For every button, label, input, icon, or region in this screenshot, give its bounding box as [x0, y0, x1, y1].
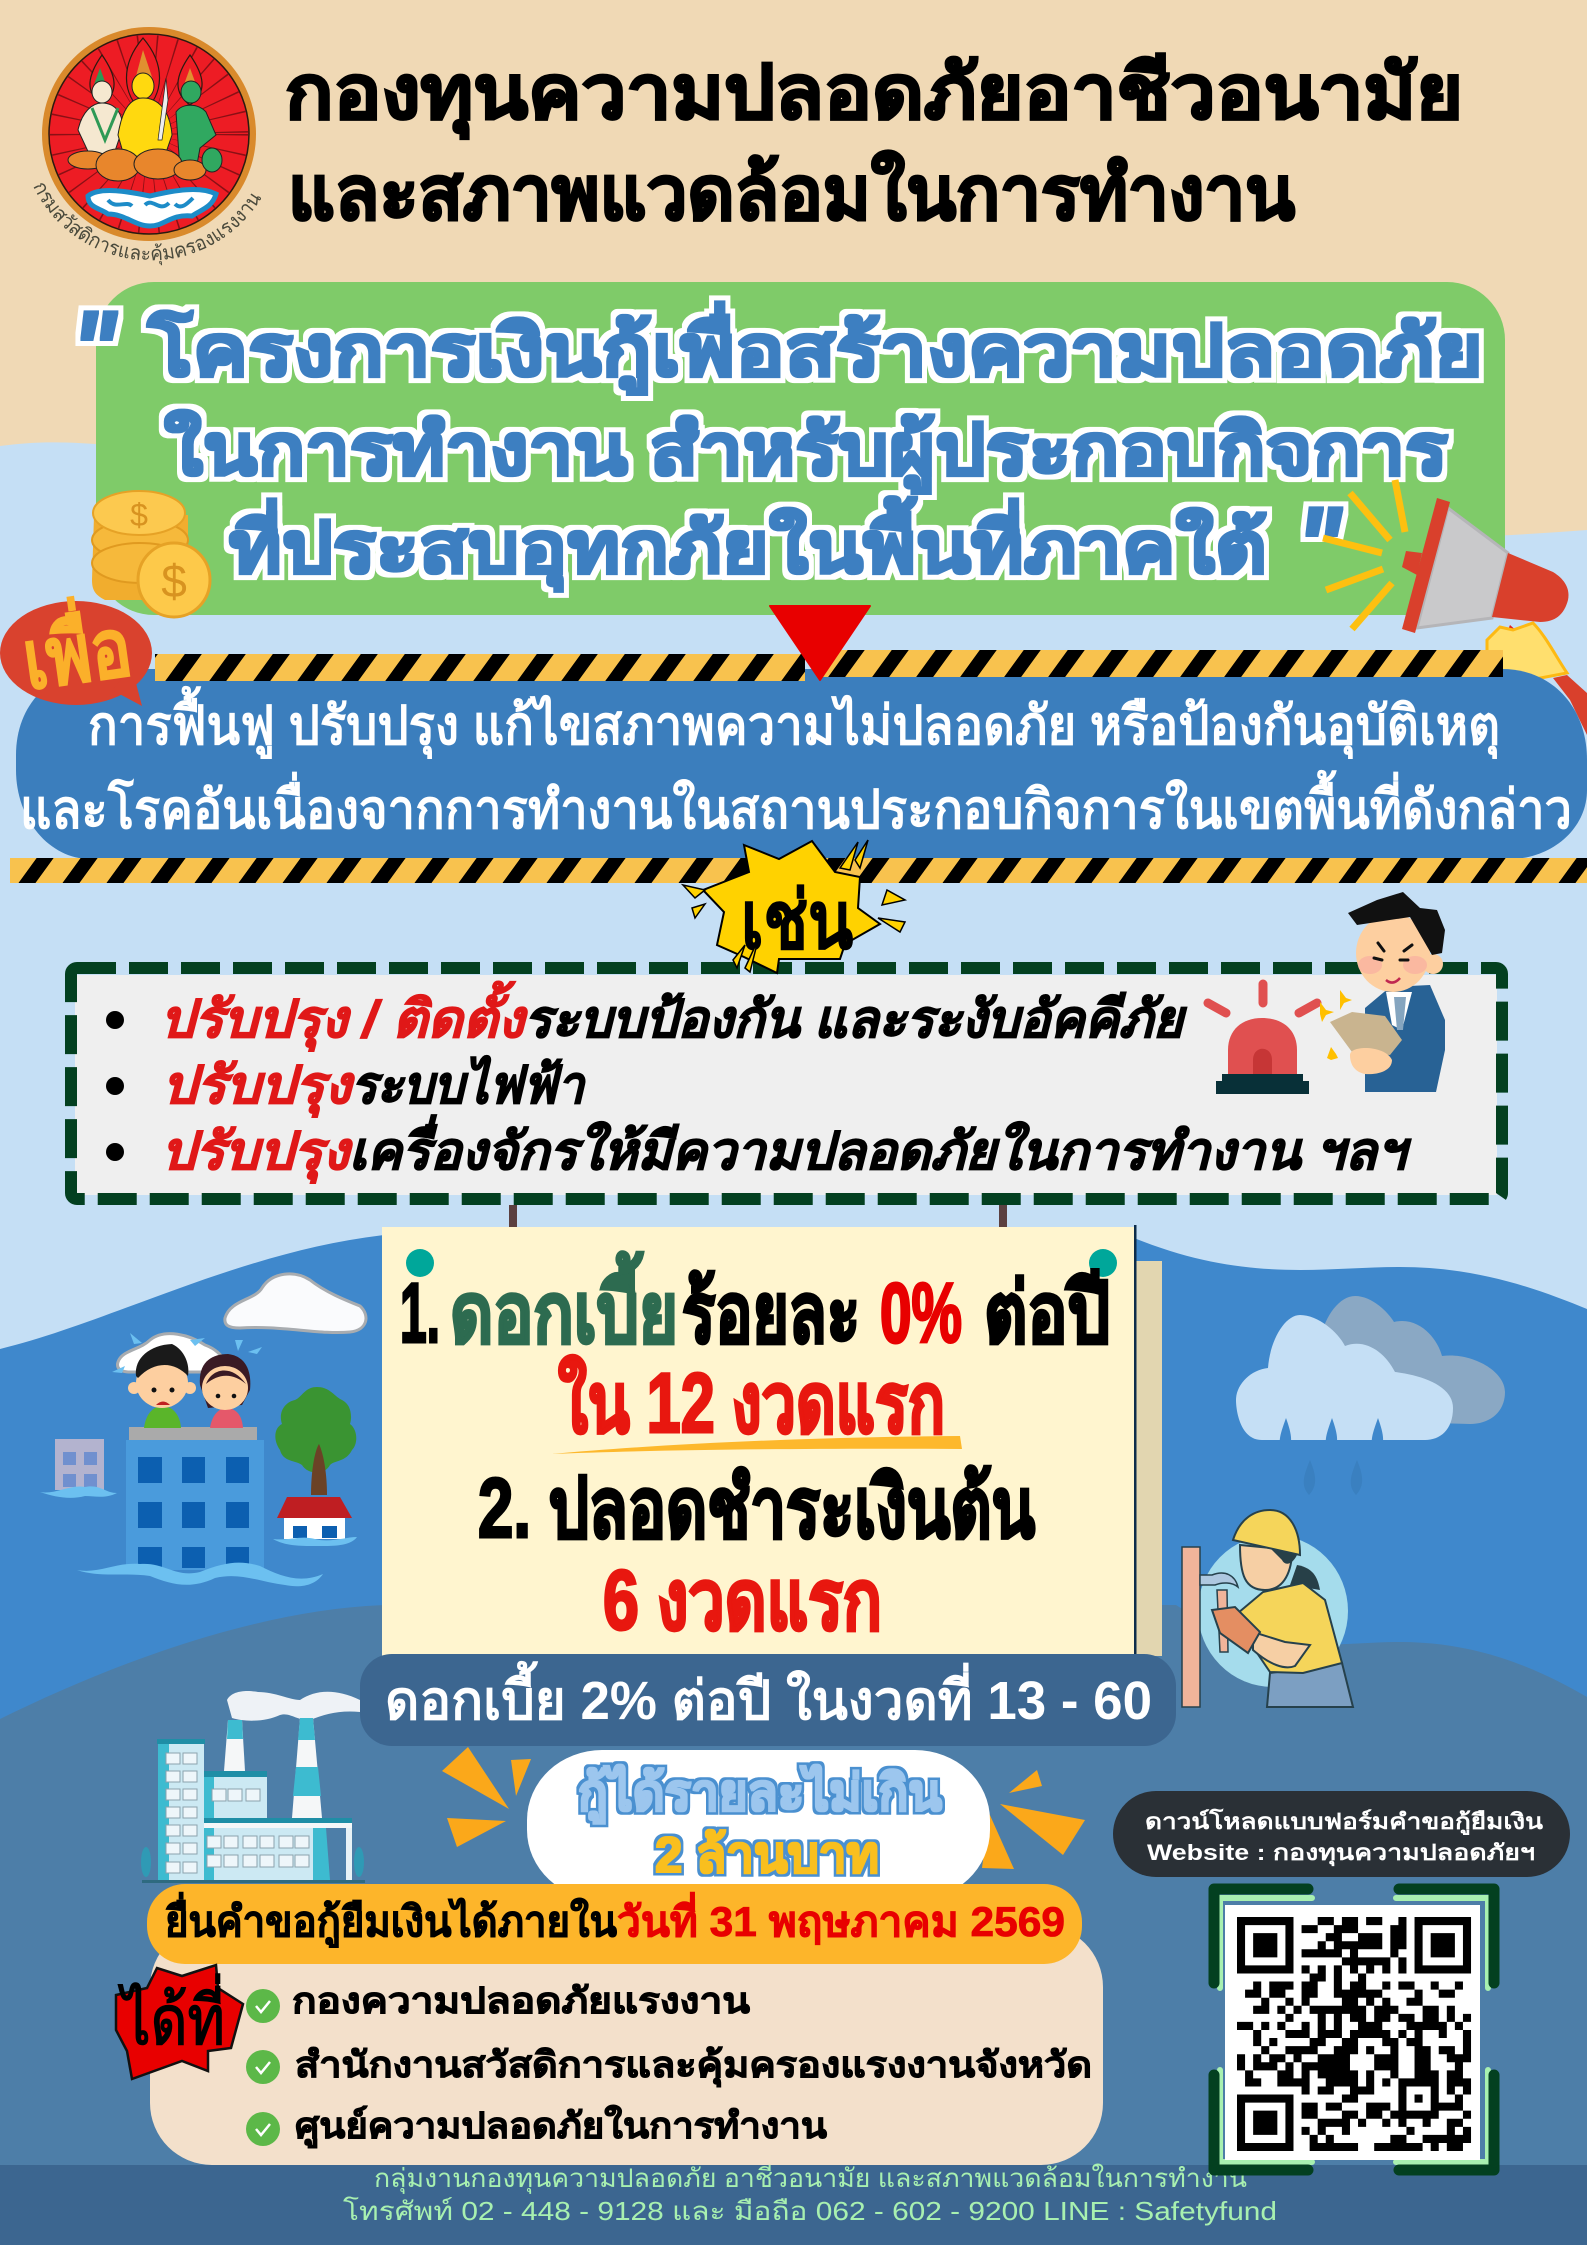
- icon: gold coins: $: [130, 497, 148, 533]
- logo: centre figure: [118, 50, 172, 170]
- list: office 3: ศูนย์ความปลอดภัยในการทำงาน: [295, 2104, 827, 2149]
- QR dark frame: [1214, 1889, 1494, 2170]
- panel: interest after month 12: ดอกเบี้ย 2% ต่อปี ในงวดที่ 13 - 60: [385, 1661, 1152, 1731]
- sign posts: [509, 1205, 1007, 1229]
- illustration: rain clouds: [1236, 1296, 1505, 1495]
- pins: [406, 1249, 1117, 1277]
- term 1: 0%: [880, 1266, 962, 1360]
- banner heading: ที่ประสบอุทกภัยในพื้นที่ภาคใต้: [229, 496, 1267, 592]
- example 3: [161, 1114, 1412, 1184]
- panel: loan limit: [527, 1750, 990, 1900]
- burst rays around loan limit: [442, 1747, 1085, 1869]
- term 2 duration: 6 งวดแรก: [603, 1553, 882, 1647]
- term 1: ต่อปี: [984, 1266, 1110, 1360]
- badge: เช่น: เช่น: [741, 876, 853, 965]
- logo: department seal: [34, 27, 261, 266]
- tree: [275, 1387, 356, 1495]
- term 1 duration: ใน 12 งวดแรก: [558, 1355, 945, 1450]
- panel: examples: [71, 968, 1502, 1199]
- example 2: ปรับปรุง: [162, 1057, 355, 1118]
- term 1: ร้อยละ: [682, 1266, 860, 1360]
- example 1: [160, 981, 1187, 1052]
- illustration: flood scene: [40, 1274, 366, 1586]
- application deadline: [147, 1884, 1082, 1964]
- example 3: ปรับปรุง: [161, 1123, 353, 1184]
- panel: download form: [1113, 1791, 1570, 1877]
- badge: ได้ที่: [116, 1965, 243, 2079]
- illustration: factory: [141, 1691, 365, 1883]
- logo: left figure: [78, 68, 122, 160]
- footer band: [0, 2165, 1587, 2245]
- badge: ได้ที่: ได้ที่: [118, 1974, 225, 2059]
- ground and trees: [142, 1880, 365, 1883]
- panel: interest after month 12: [360, 1654, 1176, 1746]
- worried girl: [200, 1354, 250, 1428]
- title: และสภาพแวดล้อมในการทำงาน: [288, 150, 1295, 235]
- panel: loan terms notice board: [382, 1225, 1162, 1657]
- panel: loan limit: กู้ได้รายละไม่เกิน: [578, 1764, 942, 1824]
- example 2: ระบบไฟฟ้า: [351, 1055, 587, 1115]
- term 1: 1.: [400, 1266, 440, 1360]
- logo: lower kneeling bodies: [68, 148, 222, 181]
- illustration: construction worker: [1182, 1510, 1353, 1707]
- hazard tape lower: [10, 858, 1587, 883]
- term 1: [400, 1251, 1110, 1360]
- sweat drops: [112, 1333, 262, 1373]
- icon: megaphone: [1323, 480, 1587, 735]
- example 1: ปรับปรุง / ติดตั้ง: [160, 981, 528, 1052]
- windows: [166, 1753, 309, 1873]
- panel: purpose: [16, 669, 1587, 859]
- panel: download form: Website : กองทุนความปลอดภัยฯ: [1147, 1840, 1535, 1867]
- title: กองทุนความปลอดภัยอาชีวอนามัย: [285, 50, 1463, 139]
- badge: เช่น: [683, 840, 905, 973]
- flooded apartment: [77, 1427, 323, 1586]
- term 2: 2. ปลอดชำระเงินต้น: [478, 1461, 1035, 1555]
- example 3: เครื่องจักรให้มีความปลอดภัยในการทำงาน ฯลฯ: [349, 1114, 1412, 1181]
- panel: where to apply: [116, 1884, 1103, 2165]
- small flooded building: [40, 1439, 117, 1498]
- banner heading: [72, 289, 1483, 608]
- panel: loan limit: 2 ล้านบาท: [655, 1827, 879, 1883]
- logo: right figure: [176, 68, 216, 170]
- banner heading: ": [1297, 485, 1343, 608]
- title: [285, 50, 1463, 235]
- panel: project banner: [72, 282, 1505, 615]
- icon: red triangle marker: [770, 606, 870, 680]
- term 1: ดอกเบี้ย: [450, 1251, 678, 1360]
- bullets: [106, 1011, 124, 1161]
- application deadline: วันที่ 31 พฤษภาคม 2569: [617, 1892, 1065, 1945]
- footer contact: [343, 2163, 1277, 2226]
- icon: businessman with cash: [1320, 892, 1445, 1092]
- icon: siren: [1208, 984, 1317, 1094]
- hazard tape upper: [155, 650, 1503, 681]
- cloud behind kids: [118, 1334, 228, 1372]
- purpose text: [20, 686, 1572, 840]
- banner heading: ": [72, 289, 118, 412]
- QR light frame: [1220, 1898, 1488, 2162]
- example 2: [162, 1055, 587, 1118]
- list: office 1: กองความปลอดภัยแรงงาน: [292, 1980, 750, 2021]
- panel: download form: ดาวน์โหลดแบบฟอร์มคำขอกู้ยืมเงิน: [1145, 1808, 1543, 1836]
- cloud: [225, 1274, 366, 1333]
- worried boy: [128, 1344, 196, 1428]
- banner heading: ในการทำงาน สำหรับผู้ประกอบกิจการ: [164, 409, 1448, 494]
- flooded house: [273, 1497, 357, 1546]
- smoke: [227, 1691, 360, 1721]
- example 1: ระบบป้องกัน และระงับอัคคีภัย: [524, 991, 1187, 1049]
- logo: curved caption: กรมสวัสดิการและคุ้มครองแรงงาน: [34, 183, 261, 266]
- icon: gold coins: [92, 491, 210, 617]
- yellow underline: [552, 1436, 962, 1454]
- footer contact: โทรศัพท์ 02 - 448 - 9128 และ มือถือ 062 - 602 - 9200 LINE : Safetyfund: [343, 2196, 1277, 2226]
- logo: cloud: [88, 190, 216, 226]
- banner heading: โครงการเงินกู้เพื่อสร้างความปลอดภัย: [147, 301, 1483, 395]
- list: office 2: สำนักงานสวัสดิการและคุ้มครองแรงงานจังหวัด: [295, 2044, 1092, 2088]
- icon: gold coins: $: [161, 555, 187, 607]
- badge: เพื่อ: เพื่อ: [16, 589, 137, 707]
- QR code: [1214, 1889, 1494, 2170]
- application deadline: ยื่นคำขอกู้ยืมเงินได้ภายใน: [165, 1892, 617, 1948]
- footer contact: กลุ่มงานกองทุนความปลอดภัย อาชีวอนามัย และสภาพแวดล้อมในการทำงาน: [374, 2163, 1247, 2194]
